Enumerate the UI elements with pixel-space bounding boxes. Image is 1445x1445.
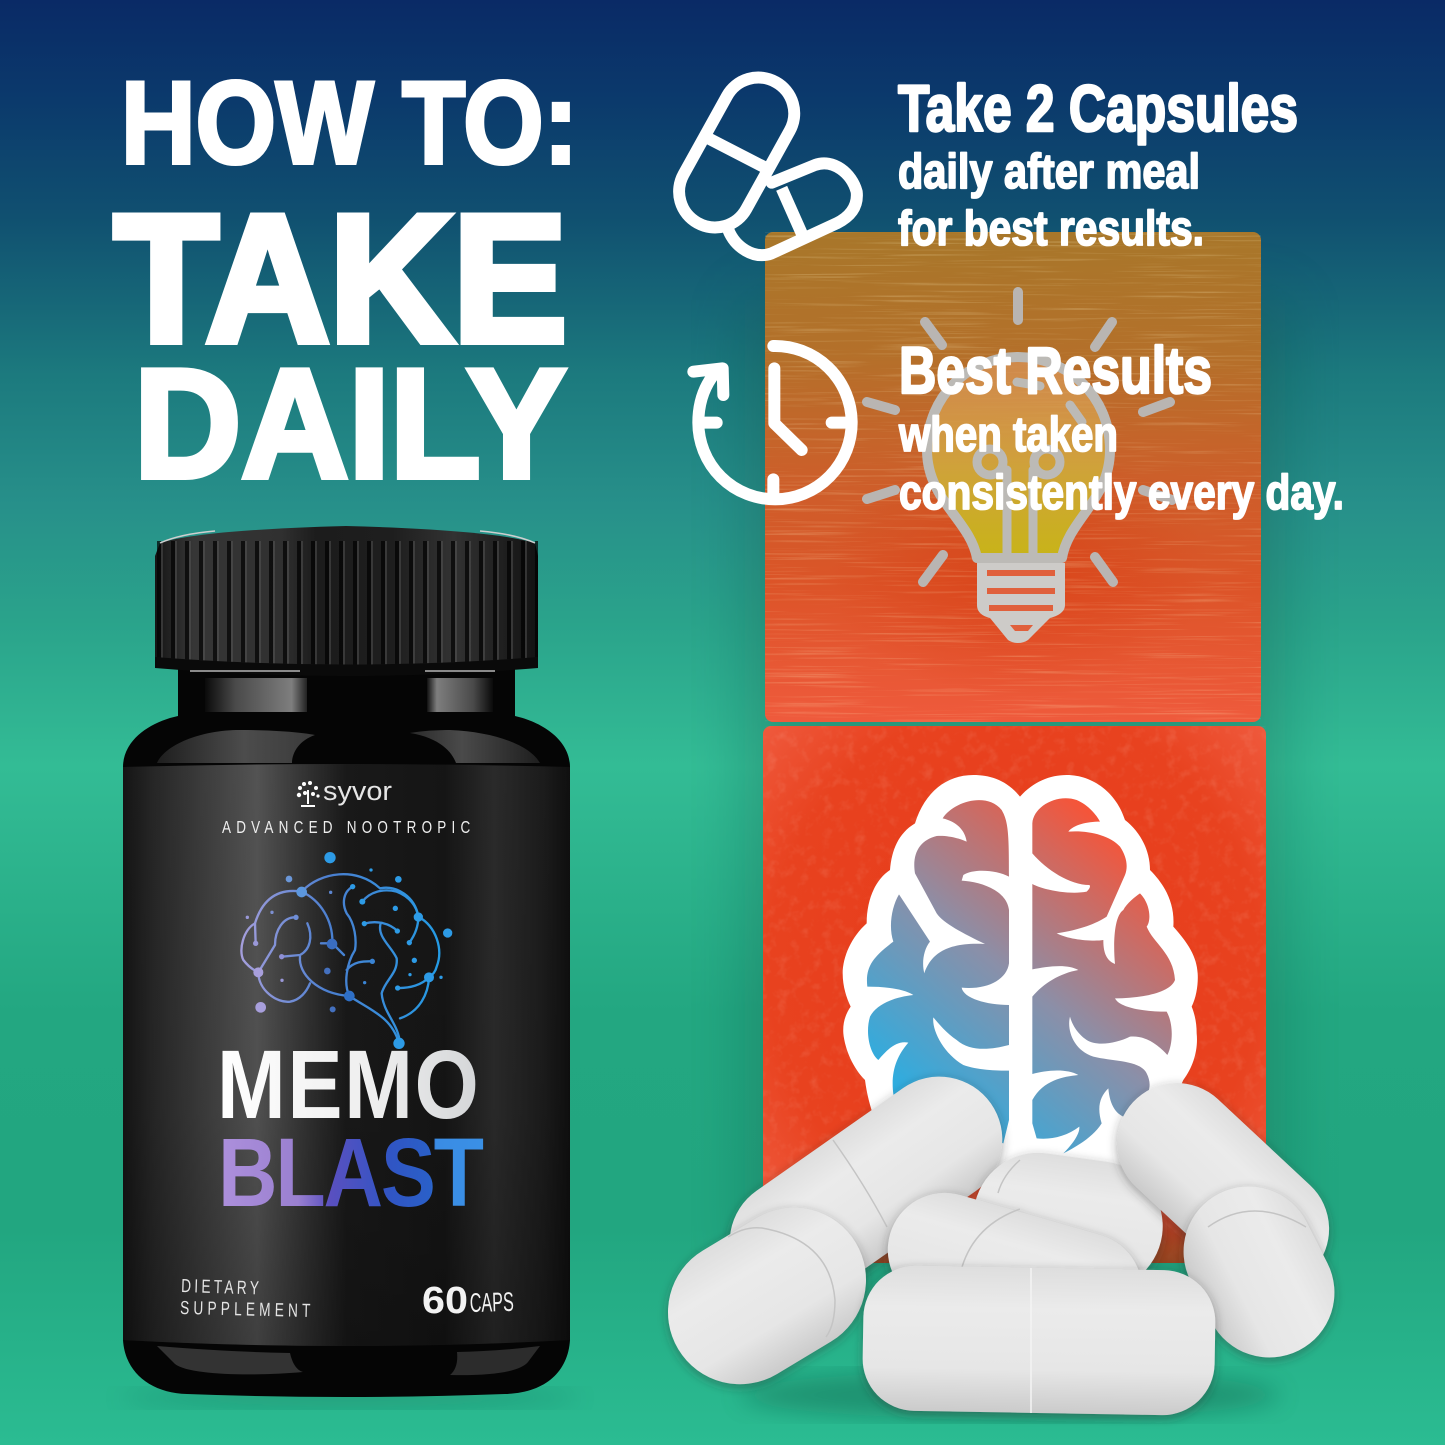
product bottle xyxy=(120,526,580,1408)
bottle neck and body xyxy=(123,660,570,1397)
icon: lightbulb on block xyxy=(867,292,1172,643)
icon: clock with refresh arrow xyxy=(693,346,852,499)
bottom wooden block xyxy=(763,726,1266,1263)
label: dietary supplement: DIETARY xyxy=(181,1275,259,1299)
block shadow xyxy=(745,300,1285,1270)
capsule: front centre xyxy=(862,1265,1216,1416)
label: 60 caps: CAPS xyxy=(469,1287,514,1318)
bottle neck highlights xyxy=(205,678,493,712)
lightbulb rays xyxy=(867,292,1172,582)
capsule: back left xyxy=(705,1052,1027,1330)
label: 60 caps xyxy=(422,1280,514,1322)
lightbulb filament xyxy=(977,382,1082,558)
dosage detail line two: for best results. xyxy=(898,202,1204,256)
bottle cap xyxy=(155,526,538,676)
capsule: front left xyxy=(641,1181,893,1411)
capsule: upper right xyxy=(1092,1058,1354,1314)
lightbulb glass xyxy=(927,357,1110,558)
capsule: back centre xyxy=(965,1144,1171,1300)
pile of white capsules xyxy=(641,1052,1357,1416)
icon: white brain on block xyxy=(843,775,1198,1177)
panel: wooden blocks xyxy=(745,232,1285,1270)
ground shadow under capsules xyxy=(740,1371,1280,1419)
lightbulb base xyxy=(977,563,1065,643)
capsule: middle centre xyxy=(874,1179,1156,1361)
heading line: DAILY: DAILY xyxy=(134,337,566,510)
product name: MEMO: MEMO xyxy=(217,1032,479,1140)
text block: dosage instructions xyxy=(898,71,1298,256)
logo tree xyxy=(297,781,320,807)
bottle ground shadow xyxy=(120,1388,580,1408)
icon: capsules xyxy=(666,65,857,255)
capsule: lower right xyxy=(1161,1164,1357,1380)
label tagline: ADVANCED NOOTROPIC xyxy=(222,818,470,838)
top wooden block xyxy=(765,232,1261,722)
results detail line one: when taken xyxy=(898,408,1118,462)
dosage detail line one: daily after meal xyxy=(898,145,1200,199)
brand logo xyxy=(297,776,392,807)
shoulder highlights xyxy=(157,730,540,763)
heading line: HOW TO:: HOW TO: xyxy=(121,57,578,188)
bottle label xyxy=(123,764,570,1346)
text block: best results xyxy=(898,333,1344,520)
title: how to take daily xyxy=(114,57,578,510)
dosage heading: Take 2 Capsules xyxy=(898,71,1298,145)
neural brain nodes xyxy=(246,852,452,1049)
heading line: TAKE: TAKE xyxy=(114,178,567,380)
lightbulb base slots xyxy=(987,570,1055,631)
bottom base highlights xyxy=(157,1346,540,1375)
label: dietary supplement: SUPPLEMENT xyxy=(180,1297,311,1322)
brand name: syvor xyxy=(323,776,392,806)
neural brain lines xyxy=(241,874,439,1043)
product name: BLAST: BLAST xyxy=(218,1120,484,1228)
results heading: Best Results xyxy=(899,333,1212,407)
results detail line two: consistently every day. xyxy=(899,466,1344,520)
neural brain logo xyxy=(241,852,452,1049)
label: 60 caps: 60 xyxy=(422,1280,468,1322)
label: dietary supplement xyxy=(180,1275,311,1322)
